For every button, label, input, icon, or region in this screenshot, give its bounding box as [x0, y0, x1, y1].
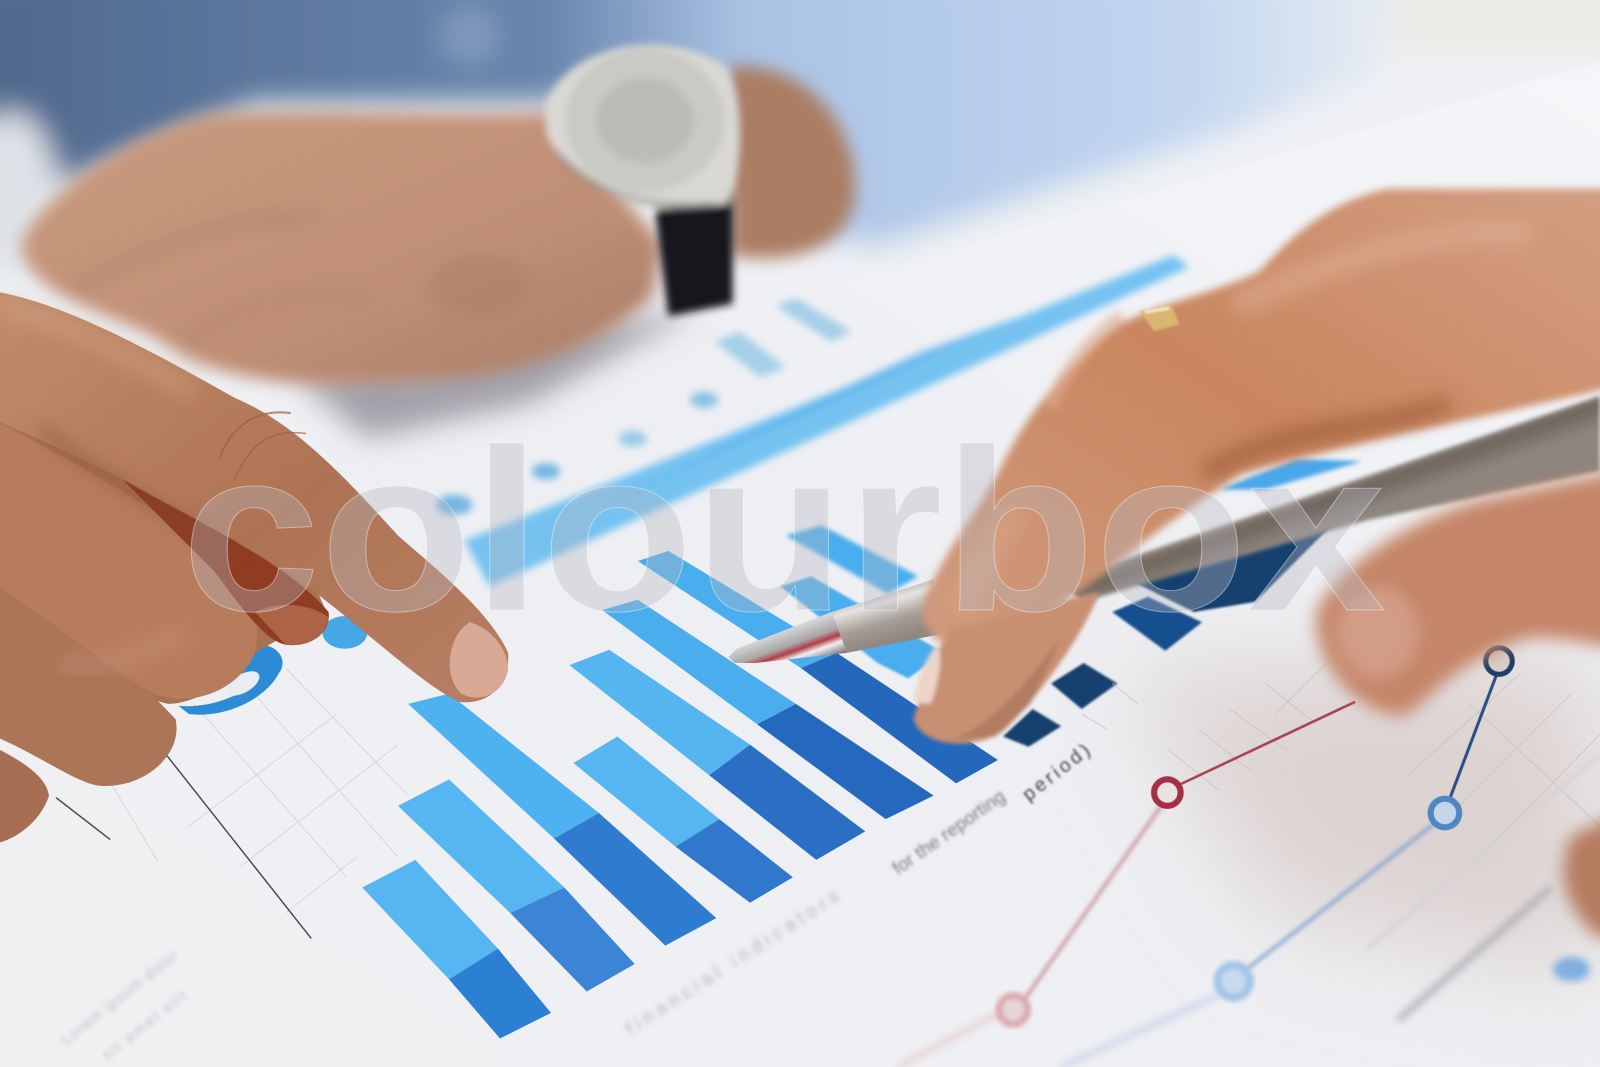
- shadow on paper beneath the back hand: [296, 306, 704, 439]
- bar 2: [398, 779, 635, 992]
- line chart: [898, 648, 1600, 1067]
- bar 1: [362, 860, 551, 1038]
- bar 5: [569, 650, 865, 860]
- bar 3: [408, 694, 716, 946]
- right hand: thumb holding the pen: [913, 592, 1100, 744]
- blurred shirt sleeve: [0, 0, 1600, 275]
- grid lines on paper, left: [112, 668, 408, 913]
- left foreground hand with pointing finger: [0, 291, 508, 845]
- faint text lower-left: Lorem ipsum dolor: [58, 947, 181, 1049]
- pen tip and cone: [729, 579, 939, 663]
- blurred background hand with cuff: [20, 66, 855, 384]
- pen: [729, 396, 1600, 663]
- bar chart: [362, 459, 1362, 1038]
- grid lines on paper, right: [1082, 663, 1600, 847]
- rotated chart caption: [621, 739, 1094, 1039]
- rotated chart caption: financial indicators: [621, 885, 842, 1039]
- right hand: blurred lower finger: [1316, 467, 1600, 938]
- axis strokes, left: [56, 755, 311, 938]
- right hand: back of hand and index finger: [923, 189, 1600, 649]
- dark bar ends: [1003, 520, 1337, 747]
- pointing index finger: [0, 291, 508, 702]
- lower knuckle: [0, 571, 177, 786]
- wedding ring: [1140, 305, 1180, 332]
- blue donut chart fragments: [179, 616, 367, 715]
- shadow crease and tucked finger: [122, 479, 329, 645]
- base of the hand filling between fingers: [0, 291, 327, 704]
- bar 8: [781, 576, 944, 678]
- faint text lower-left: sit amet elit: [99, 987, 191, 1064]
- Colourbox watermark: colourbox: [182, 401, 1386, 659]
- rotated chart caption: period): [1018, 739, 1094, 806]
- distant blue patch above pen: [1219, 459, 1362, 490]
- little finger knuckle: [0, 745, 49, 845]
- wristwatch: [546, 45, 740, 316]
- bar 9: [786, 525, 918, 594]
- bar 7: [638, 551, 998, 783]
- blue series: [1061, 648, 1600, 1067]
- rotated chart caption: for the reporting: [888, 785, 1009, 879]
- blurred upper chart with light-blue diagonal band: [436, 255, 1189, 587]
- red series: [898, 702, 1355, 1067]
- bar 4: [573, 736, 793, 903]
- pen barrel: [1061, 396, 1600, 602]
- middle finger: [0, 418, 257, 699]
- bar 6: [602, 600, 934, 819]
